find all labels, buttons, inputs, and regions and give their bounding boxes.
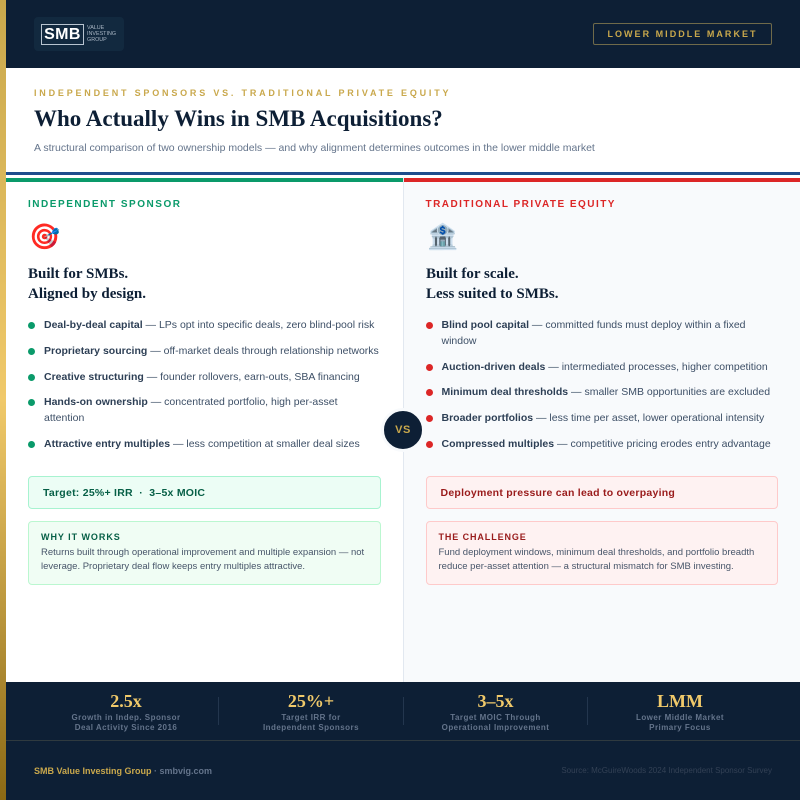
logo: GROUP bbox=[87, 37, 107, 43]
divider bbox=[6, 172, 800, 175]
bullet list: independent sponsor: Attractive entry multiples — less competition at smaller deal sizes bbox=[44, 438, 360, 450]
stat: 3-5x: Target MOIC Through bbox=[450, 713, 541, 722]
badge: lower middle market bbox=[593, 23, 772, 45]
eyebrow: INDEPENDENT SPONSORS VS. TRADITIONAL PRIVATE EQUITY bbox=[34, 88, 451, 98]
heading: built for SMBs: Built for SMBs. bbox=[28, 266, 128, 282]
title: Who Actually Wins in SMB Acquisitions? bbox=[34, 106, 443, 131]
footer brand: SMB Value Investing Group · smbvig.com bbox=[34, 766, 212, 776]
box: the challenge bbox=[426, 521, 778, 585]
bullet list: traditional private equity: Blind pool capital — committed funds must deploy within a fixed window bbox=[442, 319, 746, 347]
icon: target: 🎯 bbox=[29, 223, 60, 252]
panel label: traditional private equity: TRADITIONAL PRIVATE EQUITY bbox=[426, 199, 616, 210]
header band bbox=[0, 0, 800, 68]
VS badge bbox=[381, 408, 425, 452]
heading: built for scale: Less suited to SMBs. bbox=[426, 286, 559, 302]
panel: independent sponsor bbox=[6, 178, 404, 682]
stat: 25%+: 25%+ bbox=[288, 691, 334, 711]
icon: bank: 🏦 bbox=[427, 223, 458, 252]
heading: built for SMBs bbox=[28, 266, 146, 302]
panel: traditional private equity bbox=[404, 178, 800, 682]
footer source: Source: McGuireWoods 2024 Independent Sponsor Survey bbox=[561, 766, 772, 775]
bullet list: independent sponsor: Proprietary sourcing — off-market deals through relationship networks bbox=[44, 345, 379, 357]
callout: target returns bbox=[28, 476, 381, 509]
stats band bbox=[0, 682, 800, 800]
heading: built for scale bbox=[426, 266, 559, 302]
bullet list: independent sponsor bbox=[28, 319, 379, 450]
stat: LMM: Primary Focus bbox=[649, 722, 711, 732]
stat: 25%+ bbox=[263, 691, 359, 732]
bullet list: traditional private equity: Minimum deal thresholds — smaller SMB opportunities are excluded bbox=[442, 386, 770, 398]
stat: 3-5x bbox=[442, 691, 549, 732]
bullet list: traditional private equity bbox=[426, 319, 771, 450]
badge: lower middle market: LOWER MIDDLE MARKET bbox=[607, 29, 758, 39]
bullet list: traditional private equity: Compressed multiples — competitive pricing erodes entry advantage bbox=[442, 438, 771, 450]
stat: 2.5x: 2.5x bbox=[110, 691, 142, 711]
VS badge: VS bbox=[395, 424, 411, 436]
box: the challenge: Fund deployment windows, minimum deal thresholds, and portfolio breadth reduce per-asset attention — a structural mismatch for SMB investing. bbox=[438, 547, 754, 572]
logo: VALUE bbox=[87, 25, 104, 31]
stat: LMM bbox=[636, 691, 724, 732]
logo bbox=[34, 17, 124, 51]
bullet list: traditional private equity: Broader portfolios — less time per asset, lower operational intensity bbox=[442, 412, 764, 424]
heading: built for SMBs: Aligned by design. bbox=[28, 286, 146, 302]
bullet list: independent sponsor: Creative structuring — founder rollovers, earn-outs, SBA financing bbox=[44, 371, 360, 383]
bullet list: traditional private equity: Auction-driven deals — intermediated processes, higher competition bbox=[442, 361, 768, 373]
callout: deployment pressure bbox=[426, 476, 778, 509]
stat: 25%+: Target IRR for bbox=[281, 713, 341, 722]
stat: 3-5x: Operational Improvement bbox=[442, 722, 549, 732]
box: the challenge: THE CHALLENGE bbox=[438, 532, 527, 542]
logo: INVESTING bbox=[87, 31, 116, 37]
stat: 25%+: Independent Sponsors bbox=[263, 722, 359, 732]
callout: target returns: Target: 25%+ IRR · 3–5x MOIC bbox=[43, 487, 205, 499]
stat: 2.5x: Growth in Indep. Sponsor bbox=[71, 713, 181, 722]
bullet list: independent sponsor: Hands-on ownership — concentrated portfolio, high per-asset attention bbox=[44, 396, 338, 424]
box: why it works: Returns built through operational improvement and multiple expansion — not leverage. Proprietary deal flow keeps entry multiples attractive. bbox=[41, 547, 364, 572]
stat: LMM: Lower Middle Market bbox=[636, 713, 724, 722]
subtitle: A structural comparison of two ownership models — and why alignment determines outcomes in the lower middle market bbox=[34, 142, 595, 154]
gold stripe bbox=[0, 0, 6, 800]
stat: 2.5x: Deal Activity Since 2016 bbox=[75, 722, 177, 732]
callout: deployment pressure: Deployment pressure can lead to overpaying bbox=[440, 487, 675, 499]
stat: LMM: LMM bbox=[657, 691, 703, 711]
logo: SMB bbox=[44, 26, 81, 43]
panel label: independent sponsor: INDEPENDENT SPONSOR bbox=[28, 199, 182, 210]
heading: built for scale: Built for scale. bbox=[426, 266, 519, 282]
box: why it works bbox=[28, 521, 381, 585]
stat: 3-5x: 3–5x bbox=[478, 691, 514, 711]
box: why it works: WHY IT WORKS bbox=[41, 532, 121, 542]
stat: 2.5x bbox=[71, 691, 181, 732]
bullet list: independent sponsor: Deal-by-deal capital — LPs opt into specific deals, zero blind-pool risk bbox=[44, 319, 374, 331]
